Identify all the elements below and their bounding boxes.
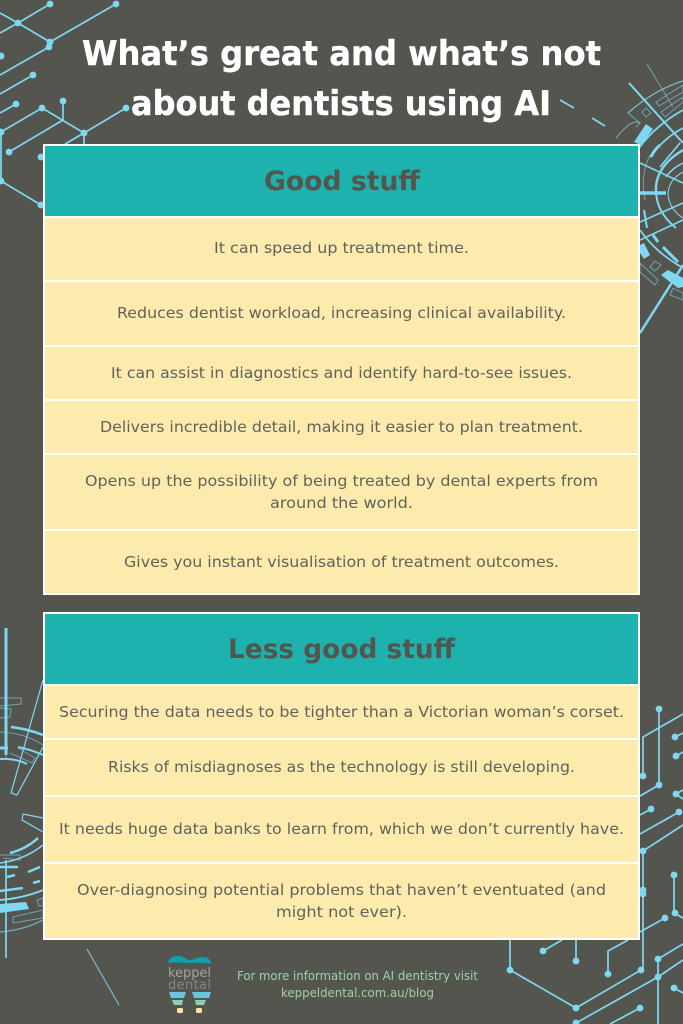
header: good stuff: [45, 146, 638, 216]
row: over-diagnosing: [45, 864, 638, 938]
header: good stuff: Good stuff: [264, 166, 421, 197]
footer note: [237, 969, 478, 1000]
row: dental experts: Opens up the possibility of being treated by dental experts from: [85, 472, 598, 490]
row: over-diagnosing: might not ever).: [276, 903, 407, 921]
row: data banks: It needs huge data banks to learn from, which we don’t currently have.: [59, 820, 624, 838]
diagonal accent line: bottom: [87, 949, 119, 1005]
logo wave: [168, 956, 211, 964]
row: diagnostics: It can assist in diagnostics and identify hard-to-see issues.: [111, 364, 572, 382]
row: speed up treatment: [45, 218, 638, 280]
row: misdiagnoses: [45, 740, 638, 795]
circuit network: bottom right: [507, 706, 683, 1024]
logo: keppel dental: [168, 956, 211, 1013]
radial tech graphic: left: [0, 628, 43, 958]
row: dental experts: around the world.: [270, 494, 413, 512]
row: misdiagnoses: Risks of misdiagnoses as the technology is still developing.: [108, 758, 575, 776]
title: about dentists using AI: [131, 84, 551, 124]
top half: [634, 124, 653, 145]
logo: keppel dental: dental: [168, 978, 211, 993]
footer note: For more information on AI dentistry visit: [237, 969, 478, 983]
panel: less good stuff: [43, 612, 640, 940]
row: visualisation: [45, 531, 638, 593]
radial tech graphic: right: [560, 64, 683, 333]
logo: keppel dental: keppel: [168, 966, 211, 981]
header: less good stuff: [45, 614, 638, 684]
circuit network: top left: [0, 1, 129, 208]
row: incredible detail: [45, 401, 638, 453]
row: dental experts: [45, 455, 638, 529]
panel: good stuff: [43, 144, 640, 595]
row: visualisation: Gives you instant visualisation of treatment outcomes.: [124, 553, 559, 571]
row: reduces workload: Reduces dentist workload, increasing clinical availability.: [117, 304, 566, 322]
row: reduces workload: [45, 282, 638, 345]
row: data banks: [45, 797, 638, 862]
row: securing data: Securing the data needs to be tighter than a Victorian woman’s corset.: [59, 703, 624, 721]
title: [82, 34, 601, 124]
footer note: keppeldental.com.au/blog: [281, 986, 434, 1000]
row: incredible detail: Delivers incredible detail, making it easier to plan treatment.: [100, 418, 583, 436]
row: securing data: [45, 686, 638, 738]
row: diagnostics: [45, 347, 638, 399]
row: speed up treatment: It can speed up treatment time.: [214, 239, 469, 257]
bottom half: [656, 190, 676, 228]
title: What’s great and what’s not: [82, 34, 601, 74]
header: less good stuff: Less good stuff: [228, 634, 456, 665]
row: over-diagnosing: Over-diagnosing potential problems that haven’t eventuated (and: [77, 881, 606, 899]
